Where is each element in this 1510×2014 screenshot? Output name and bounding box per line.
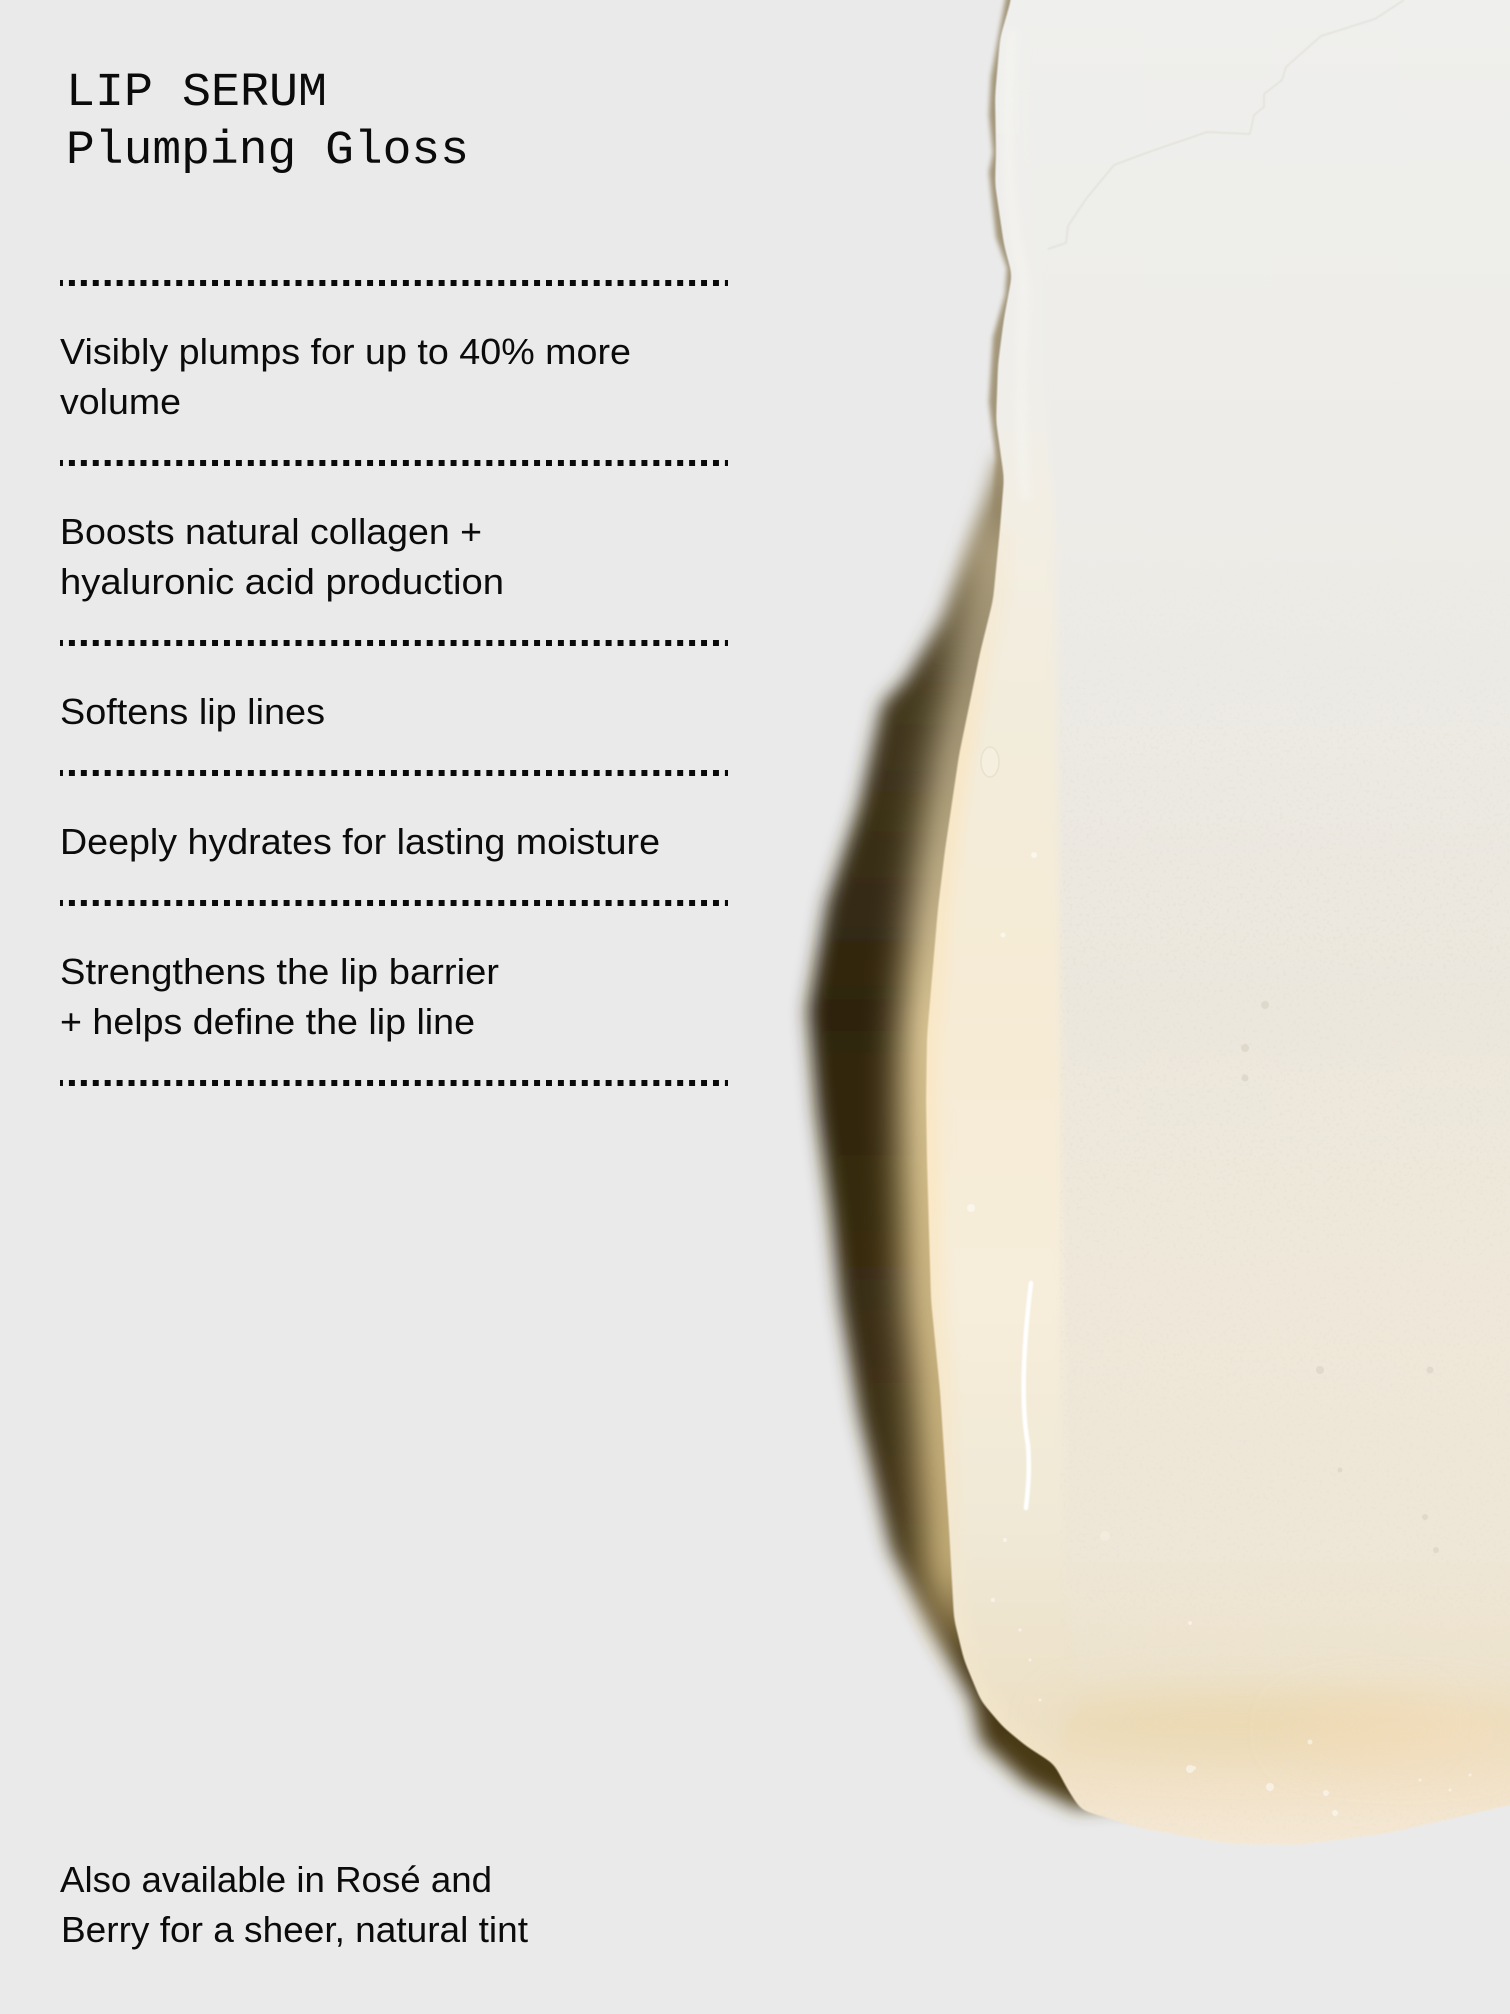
title: LIP SERUM	[66, 66, 327, 120]
top surface cracks	[1048, 0, 1404, 249]
foam texture	[1060, 560, 1510, 1850]
gel ridge	[1008, 30, 1026, 500]
availability note: Also available in Rosé and	[60, 1859, 492, 1900]
benefit: hydrates: Deeply hydrates for lasting moisture	[60, 821, 660, 862]
availability note: Berry for a sheer, natural tint	[61, 1909, 528, 1950]
availability note	[60, 1859, 528, 1950]
benefit: collagen: hyaluronic acid production	[60, 561, 504, 602]
benefit: barrier: Strengthens the lip barrier	[60, 951, 499, 992]
title: Plumping Gloss	[66, 124, 469, 178]
thin upper shadow	[989, 0, 1030, 520]
swatch body	[900, 0, 1510, 1860]
specular highlight	[1024, 1283, 1031, 1508]
warm edge of the gel	[926, 594, 998, 1466]
benefit: softens: Softens lip lines	[60, 691, 325, 732]
benefit: plumps: Visibly plumps for up to 40% more	[60, 331, 631, 372]
warm light transmitted into the shadow	[926, 528, 1000, 1660]
clear gel strip along the left edge	[946, 682, 1057, 1718]
title	[66, 66, 469, 178]
swatch cast shadow	[808, 455, 1200, 1808]
product swatch: lip serum smear	[808, 0, 1510, 1860]
benefit: collagen: Boosts natural collagen +	[60, 511, 482, 552]
benefit: collagen	[60, 511, 504, 602]
honey band at the bottom	[1108, 1691, 1323, 1746]
benefit: plumps	[60, 331, 631, 422]
benefits list	[60, 283, 728, 1083]
bubbles	[967, 747, 1472, 1816]
benefit: barrier: + helps define the lip line	[60, 1001, 475, 1042]
benefit: plumps: volume	[60, 381, 181, 422]
benefit: barrier	[60, 951, 499, 1042]
